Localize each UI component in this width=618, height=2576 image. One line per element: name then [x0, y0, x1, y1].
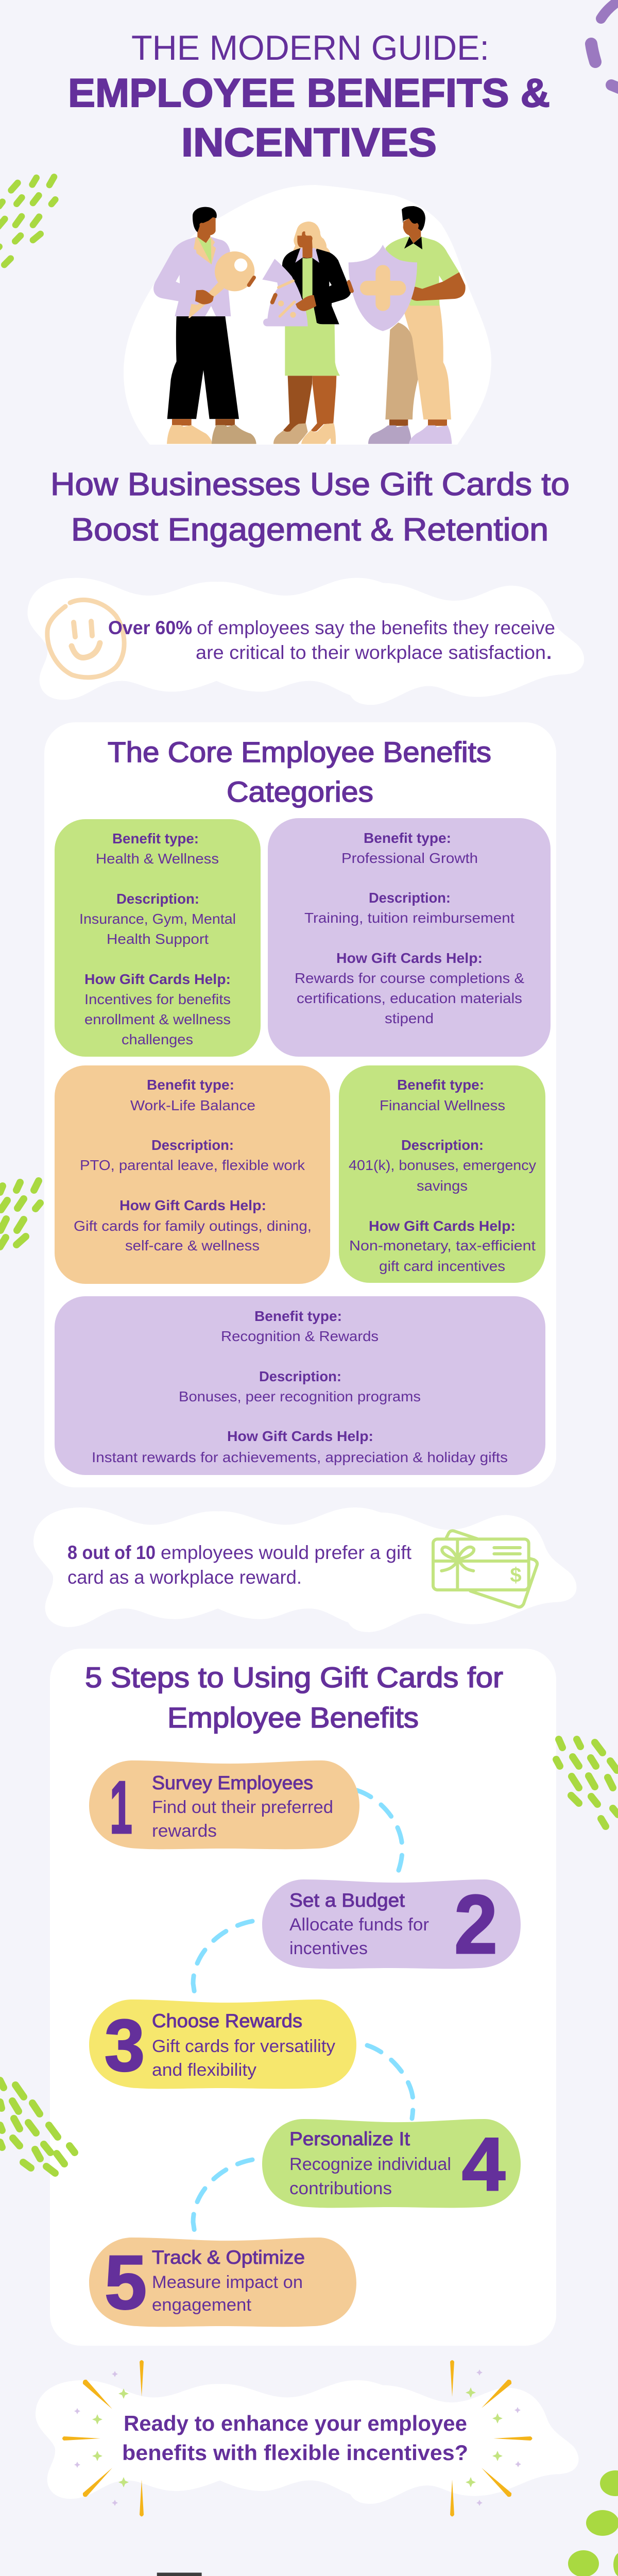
card: health and wellness: challenges: [122, 1031, 193, 1047]
title: EMPLOYEE BENEFITS &: [68, 70, 550, 115]
card: recognition and rewards: How Gift Cards Help:: [227, 1428, 373, 1444]
card: recognition and rewards: Benefit type:: [254, 1308, 342, 1324]
step 2: Allocate funds for: [289, 1915, 429, 1935]
step 3: Choose Rewards: [152, 2010, 302, 2031]
stat text: card as a workplace reward.: [67, 1567, 302, 1588]
card: professional growth: Professional Growth: [341, 850, 478, 866]
icon: gift cards: [433, 1531, 537, 1607]
arrows: dashed connectors between steps: [193, 1790, 413, 2240]
stat text: of employees say the benefits they receive: [197, 617, 555, 638]
stat text: 8 out of 10: [67, 1542, 156, 1563]
step 2: [262, 1878, 521, 1971]
stat text: employees would prefer a gift: [161, 1542, 412, 1563]
card: financial wellness: gift card incentives: [379, 1258, 505, 1274]
stat text: Over 60%: [108, 617, 192, 638]
card: professional growth: Benefit type:: [364, 830, 451, 846]
card: health and wellness: Insurance, Gym, Mental: [79, 911, 236, 927]
card: health and wellness: Description:: [116, 891, 199, 907]
card: health and wellness: Health Support: [107, 931, 209, 947]
card: professional growth: Training, tuition reimbursement: [304, 910, 514, 926]
heading: five steps: 5 Steps to Using Gift Cards for: [85, 1661, 503, 1693]
card: recognition and rewards: Instant rewards for achievements, appreciation & holiday gifts: [92, 1449, 508, 1465]
card: recognition and rewards: Recognition & Rewards: [221, 1328, 379, 1344]
card: professional growth: stipend: [385, 1010, 434, 1026]
burst stars: [74, 2369, 521, 2506]
decoration: purple dashes top right: [591, 0, 618, 89]
card: health and wellness: [55, 819, 261, 1057]
card: health and wellness: Health & Wellness: [96, 851, 219, 867]
burst lines: [62, 2360, 533, 2516]
subtitle: Boost Engagement & Retention: [71, 512, 548, 548]
panel: core benefits categories: [44, 722, 556, 1487]
step 1: [89, 1760, 359, 1849]
card: work-life balance: Benefit type:: [147, 1077, 234, 1093]
card: work-life balance: Work-Life Balance: [130, 1097, 255, 1113]
decoration: green dashes left of cards: [0, 1181, 40, 1247]
heading: core benefits: [108, 736, 491, 808]
step 4: Personalize It: [289, 2128, 410, 2149]
card: health and wellness: Incentives for benefits: [84, 991, 231, 1007]
card: recognition and rewards: Bonuses, peer recognition programs: [179, 1388, 421, 1404]
card: professional growth: certifications, education materials: [297, 990, 522, 1006]
card: health and wellness: enrollment & wellness: [84, 1011, 231, 1027]
step 1: 1: [110, 1766, 132, 1849]
heading: five steps: [85, 1661, 503, 1734]
card: work-life balance: self-care & wellness: [125, 1238, 260, 1253]
card: financial wellness: savings: [417, 1178, 468, 1194]
card: work-life balance: Description:: [151, 1137, 234, 1153]
call to action text: [122, 2411, 468, 2465]
step 1: Find out their preferred: [152, 1798, 333, 1817]
card: professional growth: Description:: [369, 890, 451, 906]
step 1: rewards: [152, 1821, 217, 1841]
card: financial wellness: Description:: [401, 1137, 484, 1153]
step 4: 4: [462, 2122, 505, 2206]
panel: five steps: [50, 1649, 556, 2346]
call to action text: Ready to enhance your employee: [124, 2411, 467, 2435]
card: health and wellness: Benefit type:: [112, 831, 199, 846]
card: work-life balance: How Gift Cards Help:: [119, 1197, 266, 1213]
title: INCENTIVES: [181, 120, 437, 165]
step 3: 3: [105, 2005, 145, 2087]
step 4: Recognize individual: [289, 2155, 451, 2174]
card: work-life balance: PTO, parental leave, flexible work: [80, 1157, 305, 1173]
card: professional growth: How Gift Cards Help:: [336, 950, 483, 966]
step 2: Set a Budget: [289, 1890, 405, 1911]
icon: gift cards: $: [510, 1564, 522, 1587]
card: professional growth: Rewards for course completions &: [295, 970, 524, 986]
stat text: .: [546, 642, 552, 663]
heading: five steps: Employee Benefits: [167, 1701, 419, 1734]
card: financial wellness: How Gift Cards Help:: [369, 1218, 516, 1234]
decoration: green dashes right of steps: [556, 1739, 618, 1826]
card: financial wellness: Financial Wellness: [380, 1097, 505, 1113]
callout: ready to enhance: [36, 2360, 578, 2516]
step 4: contributions: [289, 2179, 392, 2198]
title: THE MODERN GUIDE:: [131, 28, 489, 67]
card: work-life balance: Gift cards for family outings, dining,: [74, 1218, 312, 1234]
stat text: [67, 1542, 412, 1588]
title: [68, 28, 550, 165]
figure: man with key: [153, 207, 256, 444]
call to action text: benefits with flexible incentives?: [122, 2441, 468, 2465]
card: professional growth: [268, 818, 551, 1057]
decoration: green dashes left of steps: [0, 2080, 75, 2173]
decoration: green dashes left of hero: [0, 177, 55, 265]
decoration: green dots right: [568, 2470, 618, 2576]
card: health and wellness: How Gift Cards Help:: [84, 971, 231, 987]
card: financial wellness: [339, 1065, 545, 1283]
heading: core benefits: The Core Employee Benefits: [108, 736, 491, 768]
step 5: engagement: [152, 2295, 252, 2315]
figure: man with shield: [349, 206, 466, 444]
heading: core benefits: Categories: [227, 775, 373, 808]
step 2: incentives: [289, 1939, 368, 1958]
step 3: and flexibility: [152, 2060, 256, 2080]
card: recognition and rewards: [55, 1296, 545, 1475]
step 3: Gift cards for versatility: [152, 2037, 335, 2056]
step 5: Track & Optimize: [152, 2247, 305, 2268]
step 4: [262, 2119, 521, 2208]
card: work-life balance: [55, 1065, 330, 1284]
figure: woman with bag: [262, 222, 352, 444]
step 1: Survey Employees: [152, 1772, 313, 1793]
step 2: 2: [454, 1878, 497, 1971]
subtitle: How Businesses Use Gift Cards to: [50, 467, 570, 502]
icon: smiley face: [47, 600, 124, 677]
hero illustration: three employees on a white blob: [124, 185, 491, 445]
step 3: [89, 1999, 356, 2089]
callout: 8 out of 10 stat: [33, 1507, 576, 1632]
step 5: Measure impact on: [152, 2273, 303, 2292]
stat text: are critical to their workplace satisfaction: [196, 642, 546, 663]
card: financial wellness: Non-monetary, tax-efficient: [349, 1238, 536, 1253]
callout: over 60% stat: [28, 578, 584, 705]
card: recognition and rewards: Description:: [259, 1368, 341, 1384]
card: financial wellness: 401(k), bonuses, emergency: [349, 1157, 536, 1173]
stat text: [108, 617, 555, 663]
subtitle: [50, 467, 570, 548]
card: financial wellness: Benefit type:: [397, 1077, 484, 1093]
step 5: 5: [105, 2240, 147, 2325]
step 5: [89, 2238, 356, 2327]
